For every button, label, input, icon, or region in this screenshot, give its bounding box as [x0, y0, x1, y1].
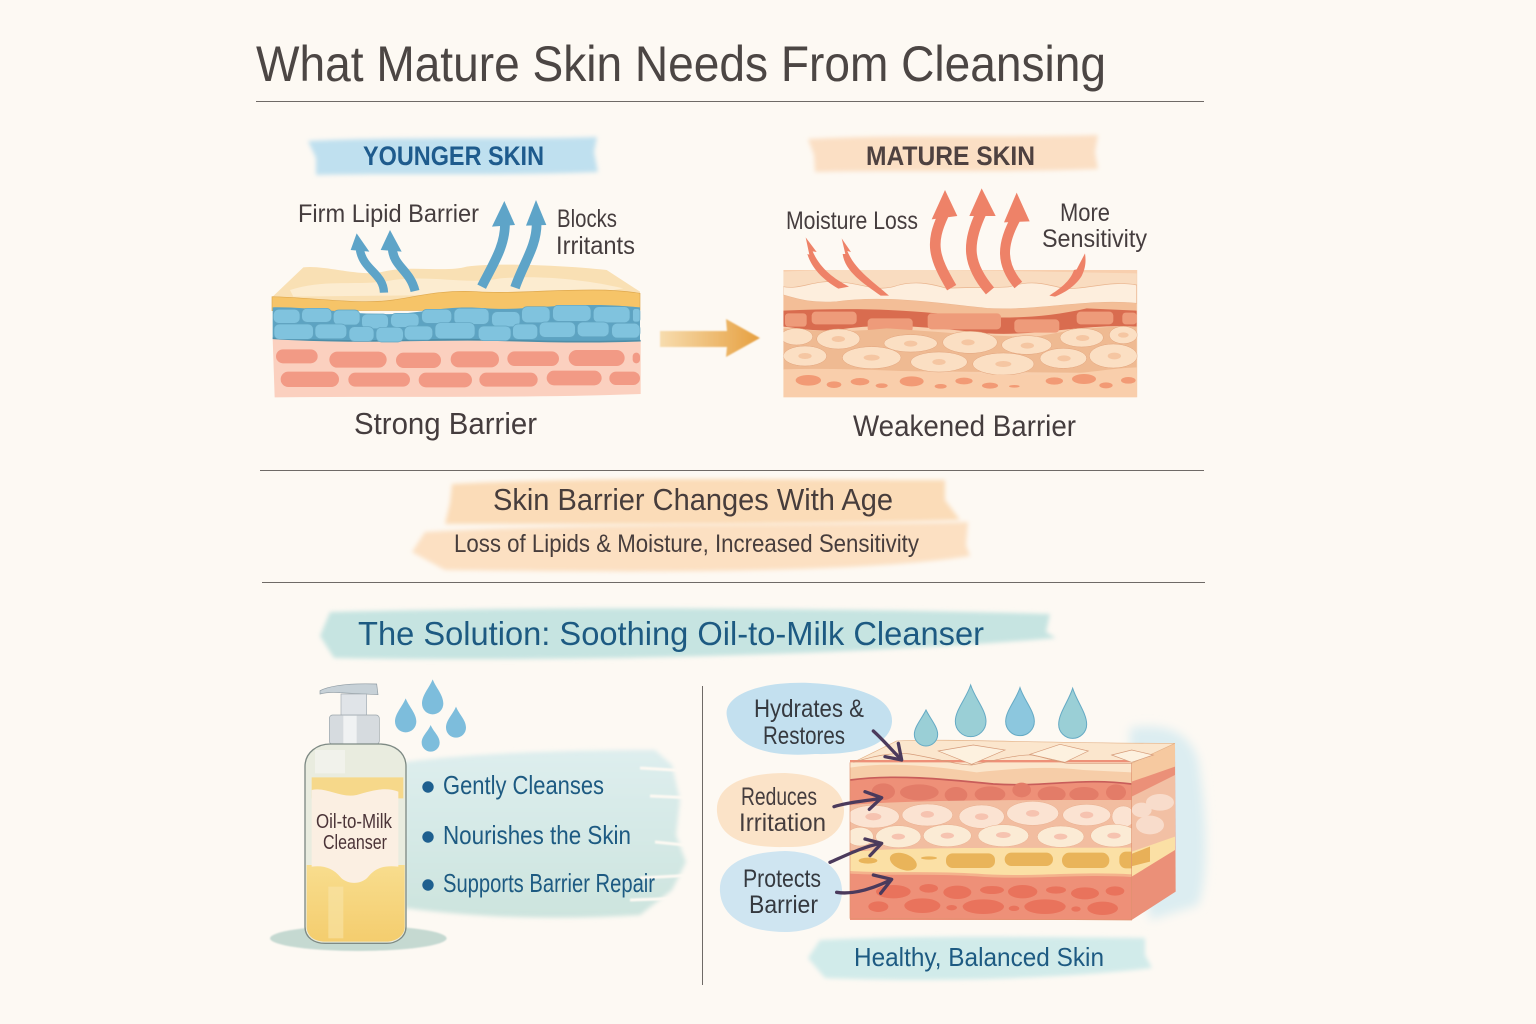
arrows: blue upward arrows — [351, 200, 546, 293]
panel: benefits list — [405, 750, 695, 918]
arrows: callouts to skin layers — [830, 731, 902, 893]
callout: hydrates and restores — [727, 683, 892, 755]
label: moisture loss: Moisture Loss — [786, 207, 918, 235]
title: What Mature Skin Needs From Cleansing — [256, 36, 1106, 92]
arrow: younger to mature — [660, 319, 760, 357]
label: more sensitivity — [1042, 199, 1147, 253]
skin diagram: weakened barrier layers — [781, 270, 1137, 397]
benefit: gently cleanses: Gently Cleanses — [443, 770, 604, 800]
callout: protects barrier: Barrier — [749, 891, 818, 919]
hydration droplets — [914, 685, 1087, 746]
callout: protects barrier: Protects — [743, 865, 821, 893]
benefit: supports barrier repair: Supports Barrier Repair — [443, 868, 655, 898]
younger skin heading: YOUNGER SKIN — [363, 141, 544, 171]
skin diagram: strong barrier layers — [272, 265, 641, 397]
callout: reduces irritation — [717, 773, 844, 847]
heading: the solution — [320, 608, 1056, 659]
panel: younger skin — [272, 137, 641, 441]
banner: skin barrier changes with age: Skin Barrier Changes With Age — [493, 482, 893, 517]
arrows: red moisture loss arrows — [806, 188, 1086, 297]
mature skin heading — [808, 135, 1098, 172]
panel: mature skin — [781, 135, 1147, 443]
bottle label text: Cleanser — [323, 832, 387, 854]
banner: skin barrier changes with age — [412, 479, 970, 571]
label: more sensitivity: More — [1060, 199, 1110, 227]
label: more sensitivity: Sensitivity — [1042, 225, 1147, 253]
callout: protects barrier — [720, 851, 842, 932]
label: blocks irritants — [556, 205, 635, 260]
label: blocks irritants: Irritants — [556, 232, 635, 260]
caption: weakened barrier: Weakened Barrier — [853, 410, 1076, 443]
caption: strong barrier: Strong Barrier — [354, 406, 537, 441]
younger skin heading — [308, 137, 598, 175]
callout: reduces irritation: Irritation — [739, 809, 826, 837]
label: blocks irritants: Blocks — [557, 205, 617, 233]
callout: hydrates and restores: Hydrates & — [754, 695, 864, 723]
panel: healthy skin block — [847, 685, 1206, 920]
icon: falling droplets — [395, 679, 466, 752]
bottle label text: Oil-to-Milk — [316, 811, 393, 833]
banner: skin barrier changes with age: Loss of Lipids & Moisture, Increased Sensitivity — [454, 530, 919, 558]
skin block diagram — [847, 740, 1176, 920]
label: firm lipid barrier: Firm Lipid Barrier — [298, 200, 479, 228]
callout: hydrates and restores: Restores — [763, 722, 845, 750]
benefit: nourishes the skin: Nourishes the Skin — [443, 820, 631, 850]
watercolor backdrop — [1130, 727, 1206, 920]
banner: healthy balanced skin: Healthy, Balanced Skin — [854, 942, 1104, 972]
mature skin heading: MATURE SKIN — [866, 141, 1035, 171]
heading: the solution: The Solution: Soothing Oil-to-Milk Cleanser — [358, 615, 984, 652]
icon: cleanser bottle — [270, 684, 447, 951]
bottle label text — [316, 811, 393, 854]
callout: reduces irritation: Reduces — [741, 783, 817, 811]
banner: healthy balanced skin — [808, 937, 1152, 980]
